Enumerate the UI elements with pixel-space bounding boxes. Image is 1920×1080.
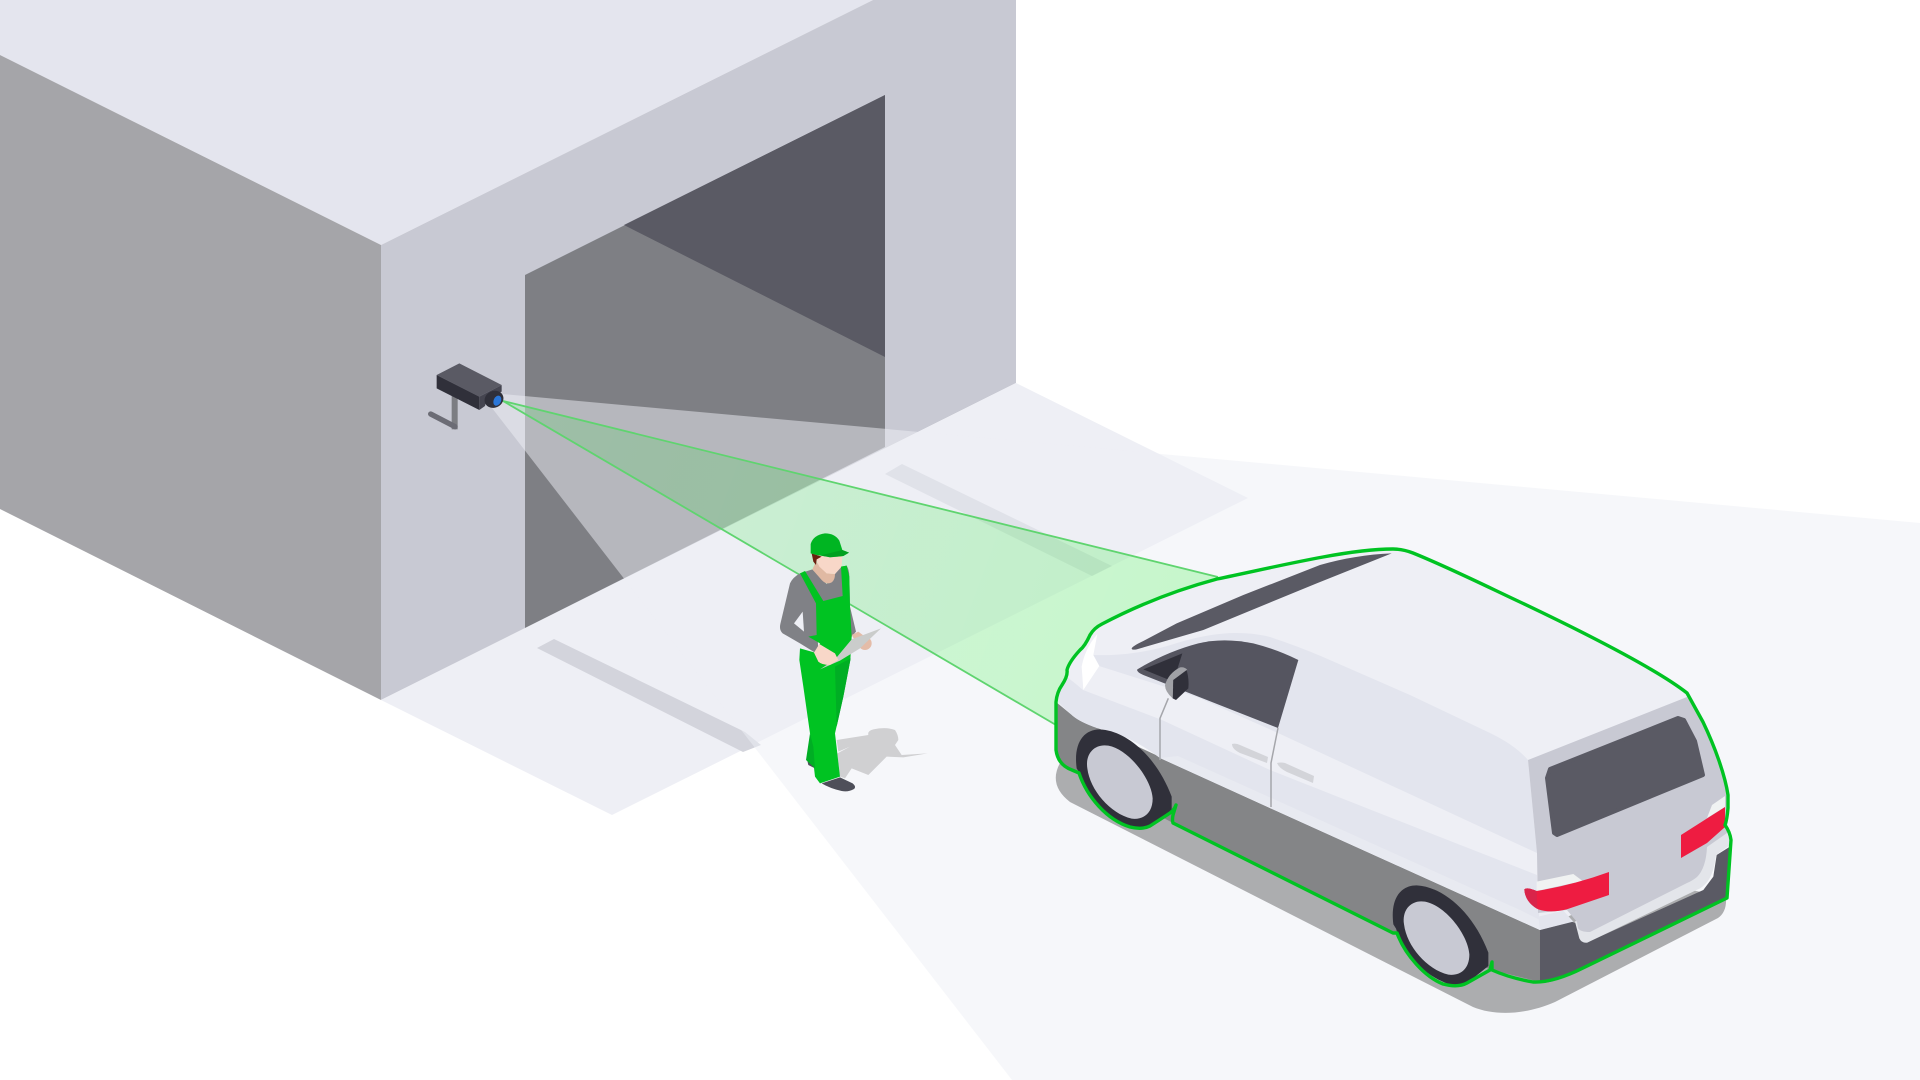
face [816, 555, 842, 574]
lower side panel [1058, 677, 1540, 930]
door seam rear [1271, 728, 1278, 807]
shoes [807, 761, 855, 791]
car ground shadow [1056, 763, 1726, 1013]
building roof [0, 0, 873, 245]
side mirror [1165, 667, 1189, 700]
green car outline [1056, 549, 1731, 986]
headlight and front details [1082, 634, 1189, 760]
worker shadow [837, 728, 928, 778]
quarter window [1143, 653, 1182, 682]
shirt [780, 566, 856, 653]
clipboard [820, 628, 881, 669]
left hand [814, 644, 838, 665]
door handles [1232, 744, 1314, 783]
camera light cone [492, 394, 1920, 1080]
rear face [1528, 697, 1728, 932]
building left wall [0, 55, 381, 700]
rear underbody [1540, 833, 1732, 983]
car body top [1056, 549, 1728, 930]
rear window [1547, 718, 1703, 835]
front wheel [1076, 729, 1172, 829]
building front wall [381, 0, 1016, 700]
rear right lamp [1707, 796, 1725, 818]
door seam front [1160, 698, 1168, 760]
garage interior dark ceiling [624, 95, 885, 357]
floor marking right [885, 464, 1112, 576]
arm gap [794, 612, 804, 632]
hair [812, 553, 822, 565]
rear bumper strip [1575, 833, 1732, 943]
green scanning beam [503, 401, 1218, 725]
side window [1137, 640, 1298, 728]
rear wheel [1393, 885, 1488, 985]
car [1056, 549, 1732, 986]
lower side strip [1160, 756, 1540, 930]
cap [811, 533, 849, 557]
rear left lights [1524, 872, 1609, 930]
underbody side [1056, 700, 1540, 982]
worker [780, 533, 928, 791]
right hand [852, 632, 872, 650]
upper side panel [1093, 633, 1537, 853]
floor panel [381, 383, 1248, 815]
neck [812, 562, 835, 583]
floor marking left [537, 639, 761, 752]
security camera [431, 363, 506, 429]
windshield [1132, 553, 1392, 728]
rear right tail light [1681, 807, 1725, 858]
building [0, 0, 1016, 700]
garage door opening [525, 95, 885, 628]
overalls [799, 566, 852, 783]
